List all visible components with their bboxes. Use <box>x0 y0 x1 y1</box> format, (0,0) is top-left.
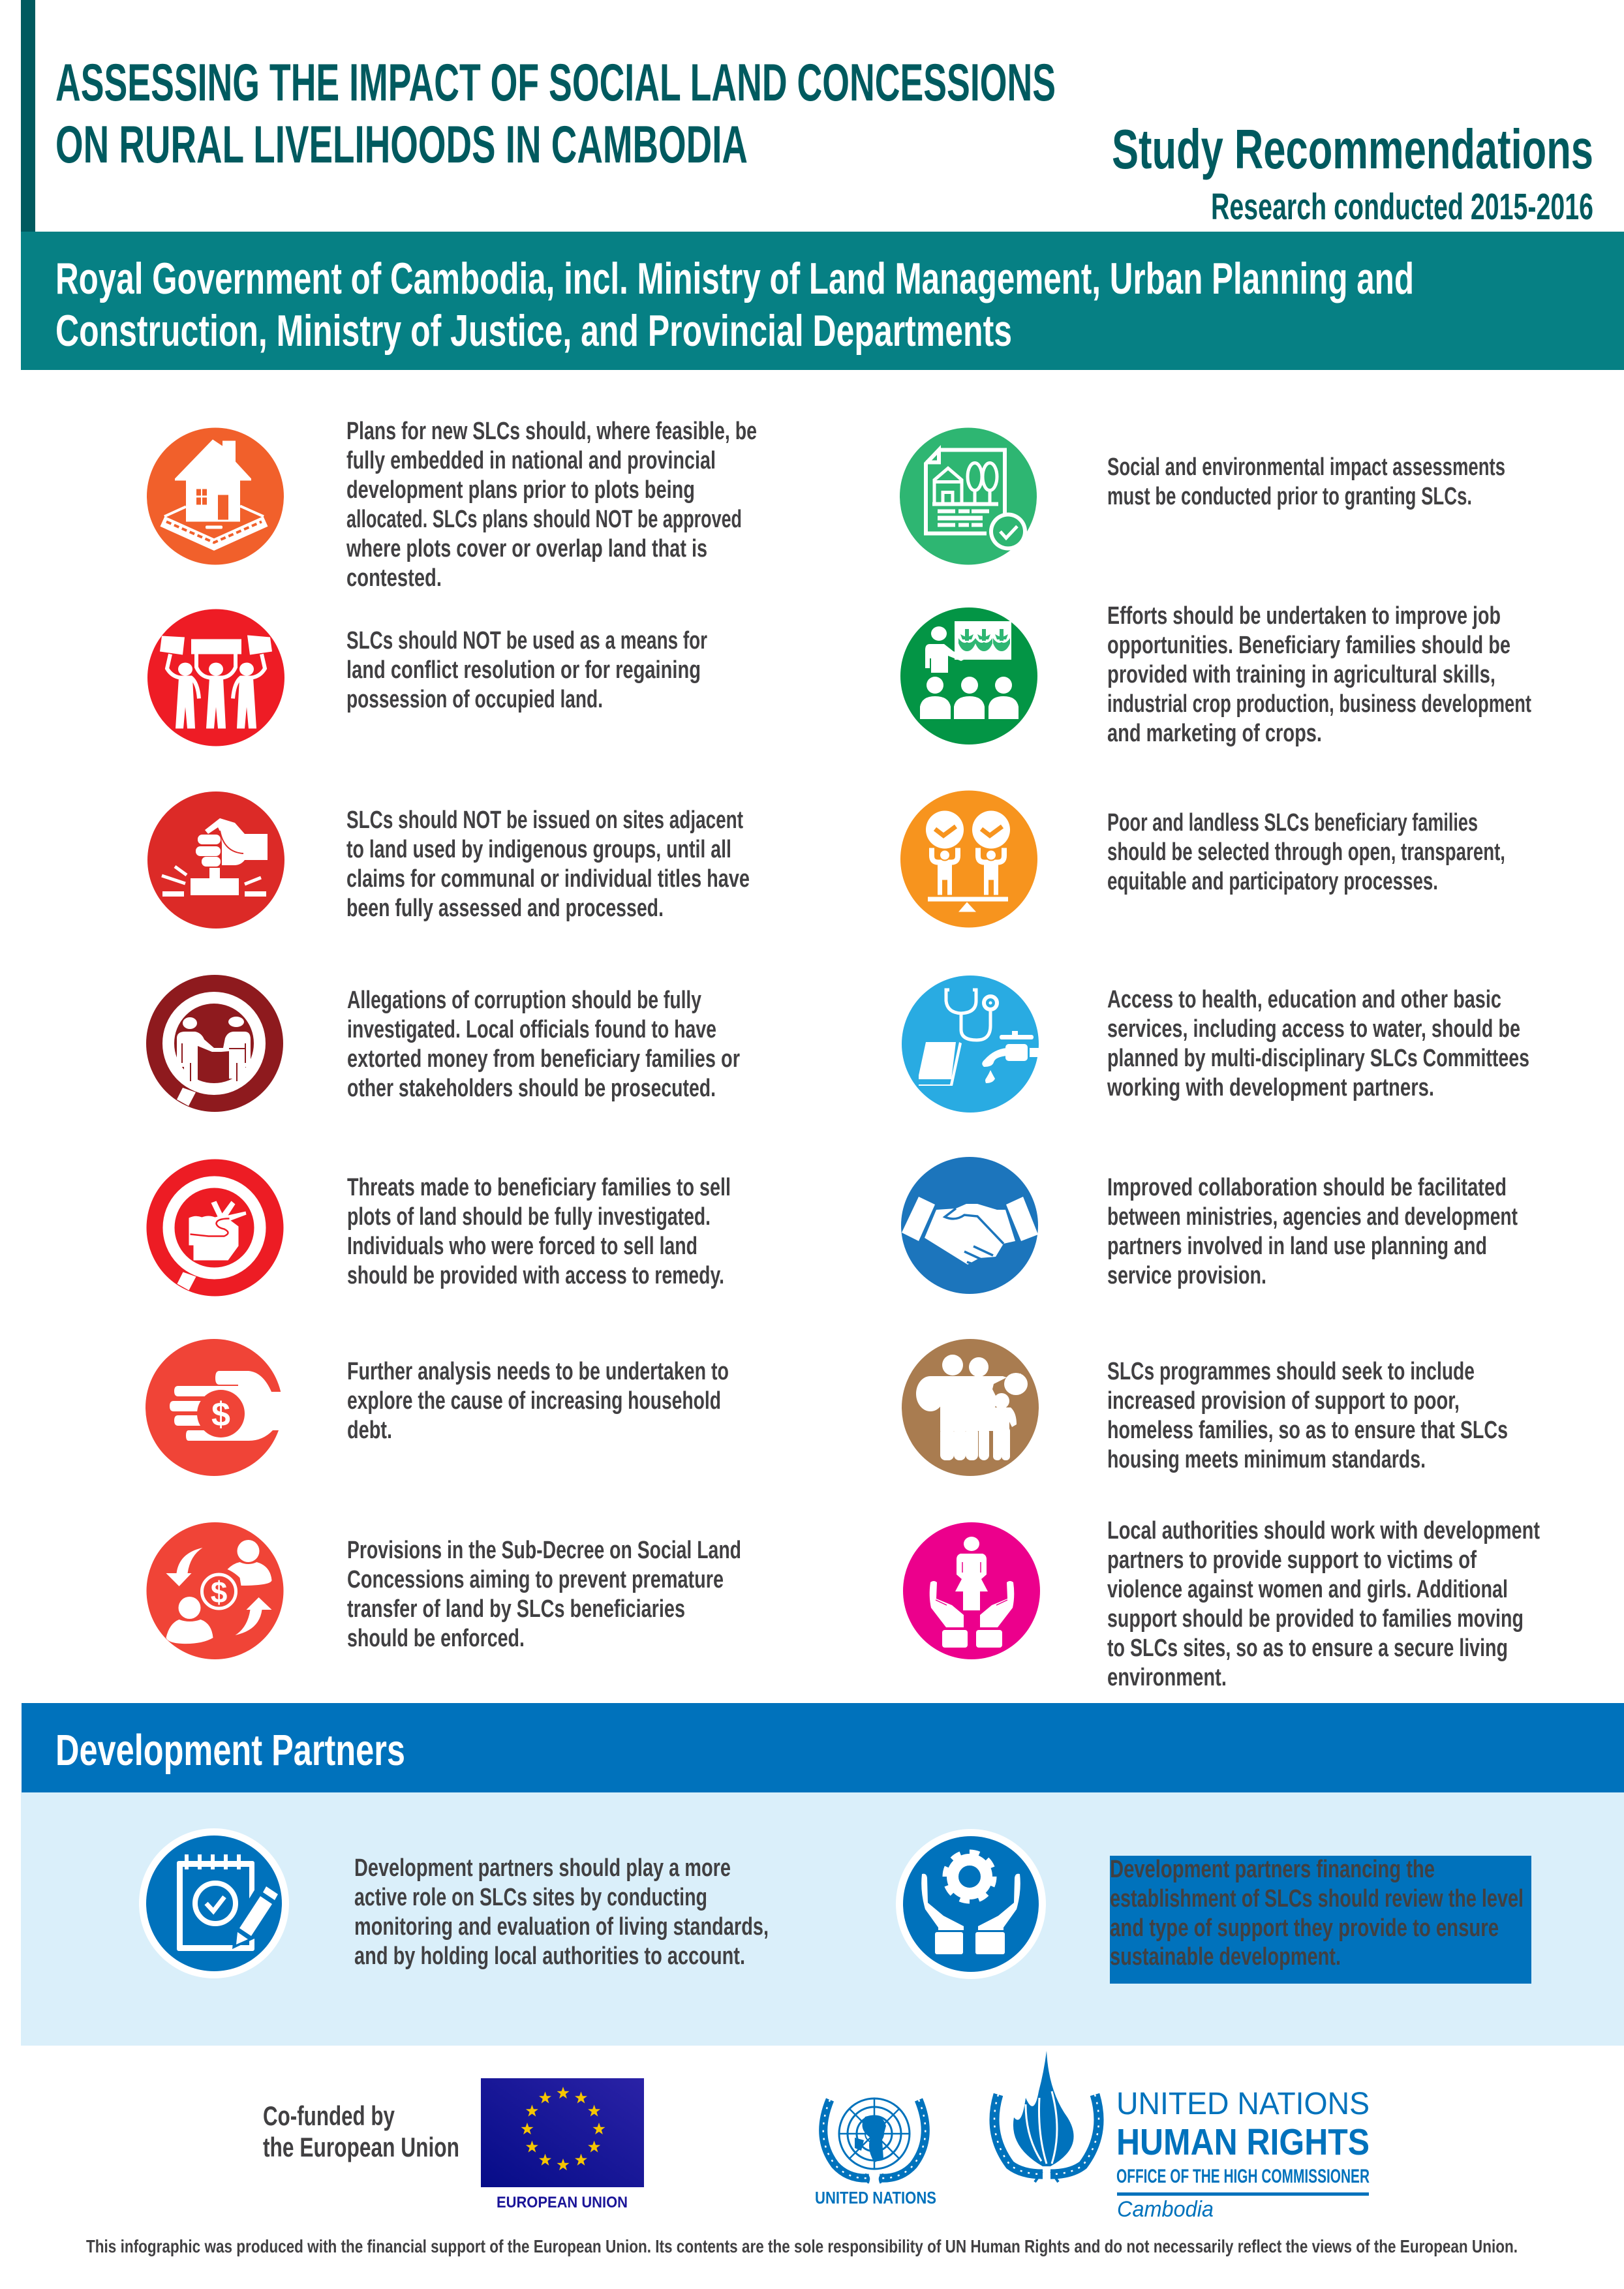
icon: people exchanging money: $ <box>211 1575 227 1609</box>
text: recommendation 11: Access to health, education and other basic <box>1107 986 1501 1013</box>
logo: UN Human Rights wordmark <box>1116 2087 1370 2222</box>
icon: handshake <box>901 1157 1038 1294</box>
panel: royal government header band <box>21 232 1624 370</box>
text: recommendation 3: claims for communal or individual titles have <box>346 865 750 893</box>
text: recommendation 13: housing meets minimum standards. <box>1107 1446 1426 1473</box>
text: recommendation 3: to land used by indigenous groups, until all <box>346 836 731 863</box>
text: recommendation 6 <box>347 1358 729 1444</box>
text: recommendation 6: debt. <box>347 1417 392 1444</box>
text: recommendation 11 <box>1107 986 1529 1101</box>
callout: highlighted development partners recommendation: Development partners financing the <box>1110 1856 1435 1883</box>
text: recommendation 2: possession of occupied land. <box>346 686 603 713</box>
text: recommendation 3 <box>346 807 750 922</box>
text: recommendation 1 <box>346 418 757 592</box>
icon: homeless family <box>902 1339 1039 1476</box>
panel: development partners body <box>21 1792 1624 2046</box>
icon: agricultural training <box>900 607 1037 745</box>
text: development partners recommendation 1: and by holding local authorities to account. <box>354 1943 745 1970</box>
panel: royal government header band: Construction, Ministry of Justice, and Provincial Departments <box>55 306 1012 356</box>
title: ON RURAL LIVELIHOODS IN CAMBODIA <box>55 115 748 174</box>
icon: impact assessment document <box>900 428 1037 565</box>
text: recommendation 12: service provision. <box>1107 1262 1266 1289</box>
text: recommendation 8 <box>1107 453 1505 510</box>
text: recommendation 9: provided with training in agricultural skills, <box>1107 661 1495 688</box>
icon: protesters with placards <box>147 609 284 746</box>
icon: health, education and water <box>902 976 1040 1113</box>
icon: hand passing coin <box>146 1339 284 1476</box>
title <box>55 54 1056 174</box>
logo: United Nations emblem: UNITED NATIONS <box>815 2188 936 2207</box>
callout: highlighted development partners recommendation: and type of support they provide to ensure <box>1110 1914 1499 1942</box>
text: recommendation 4 <box>347 987 740 1102</box>
text: recommendation 5: plots of land should be fully investigated. <box>347 1203 711 1231</box>
text: recommendation 4: extorted money from beneficiary families or <box>347 1045 740 1073</box>
text: recommendation 4: other stakeholders should be prosecuted. <box>347 1075 716 1102</box>
text: recommendation 3: SLCs should NOT be issued on sites adjacent <box>346 807 743 834</box>
icon: house on plot <box>147 428 284 565</box>
text: recommendation 13: increased provision of support to poor, <box>1107 1387 1460 1415</box>
logo: UN Human Rights wordmark: UNITED NATIONS <box>1116 2087 1370 2121</box>
text: recommendation 4: Allegations of corruption should be fully <box>347 987 701 1014</box>
text: recommendation 2 <box>346 627 707 713</box>
text: development partners recommendation 1: monitoring and evaluation of living standards, <box>354 1913 769 1941</box>
logo: UN Human Rights wordmark: Cambodia <box>1117 2197 1214 2222</box>
icon: fist on gavel <box>147 791 284 929</box>
text: recommendation 10 <box>1107 809 1505 895</box>
text: recommendation 13: SLCs programmes should seek to include <box>1107 1358 1475 1385</box>
text: recommendation 9: and marketing of crops. <box>1107 720 1322 747</box>
text: development partners recommendation 1: active role on SLCs sites by conducting <box>354 1884 707 1911</box>
text: recommendation 2: SLCs should NOT be used as a means for <box>346 627 707 654</box>
text: recommendation 1: allocated. SLCs plans should NOT be approved <box>346 506 742 533</box>
text: recommendation 10: Poor and landless SLCs beneficiary families <box>1107 809 1478 837</box>
text: recommendation 1: fully embedded in national and provincial <box>346 447 716 474</box>
text: recommendation 9 <box>1107 602 1531 747</box>
text: co-funded by the European Union <box>263 2100 459 2162</box>
icon: people exchanging money <box>146 1522 283 1659</box>
logo: European Union flag: EUROPEAN UNION <box>497 2194 628 2211</box>
text: recommendation 5: Individuals who were forced to sell land <box>347 1233 697 1260</box>
text: recommendation 1: development plans prior to plots being <box>346 476 695 504</box>
text: co-funded by the European Union: the European Union <box>263 2132 459 2162</box>
logo: United Nations emblem <box>815 2098 936 2207</box>
text: recommendation 9: Efforts should be undertaken to improve job <box>1107 602 1501 630</box>
text: recommendation 1: contested. <box>346 564 442 592</box>
text: recommendation 13 <box>1107 1358 1508 1473</box>
text: recommendation 1: where plots cover or overlap land that is <box>346 535 707 562</box>
text: recommendation 3: been fully assessed and processed. <box>346 895 664 922</box>
icon: woman protected by hands <box>903 1522 1040 1659</box>
text: recommendation 12: partners involved in land use planning and <box>1107 1233 1487 1260</box>
text: recommendation 5 <box>347 1174 731 1289</box>
text: recommendation 6: explore the cause of increasing household <box>347 1387 721 1415</box>
logo: UN Human Rights flame emblem <box>994 2051 1099 2182</box>
icon: people on balance scale <box>900 791 1037 928</box>
text: recommendation 7: transfer of land by SLCs beneficiaries <box>347 1595 685 1623</box>
text: recommendation 12: Improved collaboration should be facilitated <box>1107 1174 1507 1201</box>
logo: UN Human Rights wordmark: OFFICE OF THE HIGH COMMISSIONER <box>1116 2166 1370 2187</box>
text: recommendation 5: Threats made to beneficiary families to sell <box>347 1174 731 1201</box>
text: recommendation 7 <box>347 1537 741 1652</box>
text: recommendation 8: must be conducted prior to granting SLCs. <box>1107 483 1472 510</box>
text: recommendation 4: investigated. Local officials found to have <box>347 1016 716 1043</box>
panel: development partners heading band <box>22 1703 1624 1792</box>
callout: highlighted development partners recommendation: sustainable development. <box>1110 1943 1341 1971</box>
text: recommendation 13: homeless families, so as to ensure that SLCs <box>1107 1417 1508 1444</box>
text: co-funded by the European Union: Co-funded by <box>263 2100 395 2131</box>
text: recommendation 2: land conflict resolution or for regaining <box>346 656 701 684</box>
text: recommendation 7: Provisions in the Sub-Decree on Social Land <box>347 1537 741 1564</box>
title: ASSESSING THE IMPACT OF SOCIAL LAND CONCESSIONS <box>55 54 1056 112</box>
text: recommendation 1: Plans for new SLCs should, where feasible, be <box>346 418 757 445</box>
text: recommendation 7: should be enforced. <box>347 1625 525 1652</box>
text: recommendation 14: environment. <box>1107 1664 1227 1691</box>
text: recommendation 7: Concessions aiming to prevent premature <box>347 1566 724 1593</box>
text: recommendation 14: partners to provide support to victims of <box>1107 1546 1477 1574</box>
text: recommendation 14: violence against women and girls. Additional <box>1107 1576 1508 1603</box>
left accent bar <box>21 0 35 232</box>
text: recommendation 10: equitable and participatory processes. <box>1107 868 1438 895</box>
icon: gear held in hands <box>896 1829 1046 1979</box>
icon: notepad with pencil <box>139 1828 289 1978</box>
text: recommendation 14 <box>1107 1517 1540 1691</box>
text: recommendation 6: Further analysis needs to be undertaken to <box>347 1358 729 1385</box>
callout: highlighted development partners recommendation <box>1110 1856 1531 1984</box>
icon: hand passing coin: $ <box>211 1396 230 1434</box>
text: recommendation 14: to SLCs sites, so as to ensure a secure living <box>1107 1635 1508 1662</box>
text: recommendation 9: opportunities. Beneficiary families should be <box>1107 632 1510 659</box>
text: recommendation 5: should be provided with access to remedy. <box>347 1262 724 1289</box>
text: recommendation 11: working with development partners. <box>1107 1074 1434 1101</box>
logo: European Union flag <box>481 2078 644 2211</box>
panel: development partners heading band: Development Partners <box>55 1726 405 1775</box>
text: recommendation 12 <box>1107 1174 1518 1289</box>
text: development partners recommendation 1 <box>354 1854 769 1970</box>
icon: corrupt handshake under magnifier <box>146 975 283 1112</box>
icon: threatening fist under magnifier <box>146 1159 283 1296</box>
logo: UN Human Rights wordmark: HUMAN RIGHTS <box>1116 2121 1370 2163</box>
text: development partners recommendation 1: Development partners should play a more <box>354 1854 731 1882</box>
